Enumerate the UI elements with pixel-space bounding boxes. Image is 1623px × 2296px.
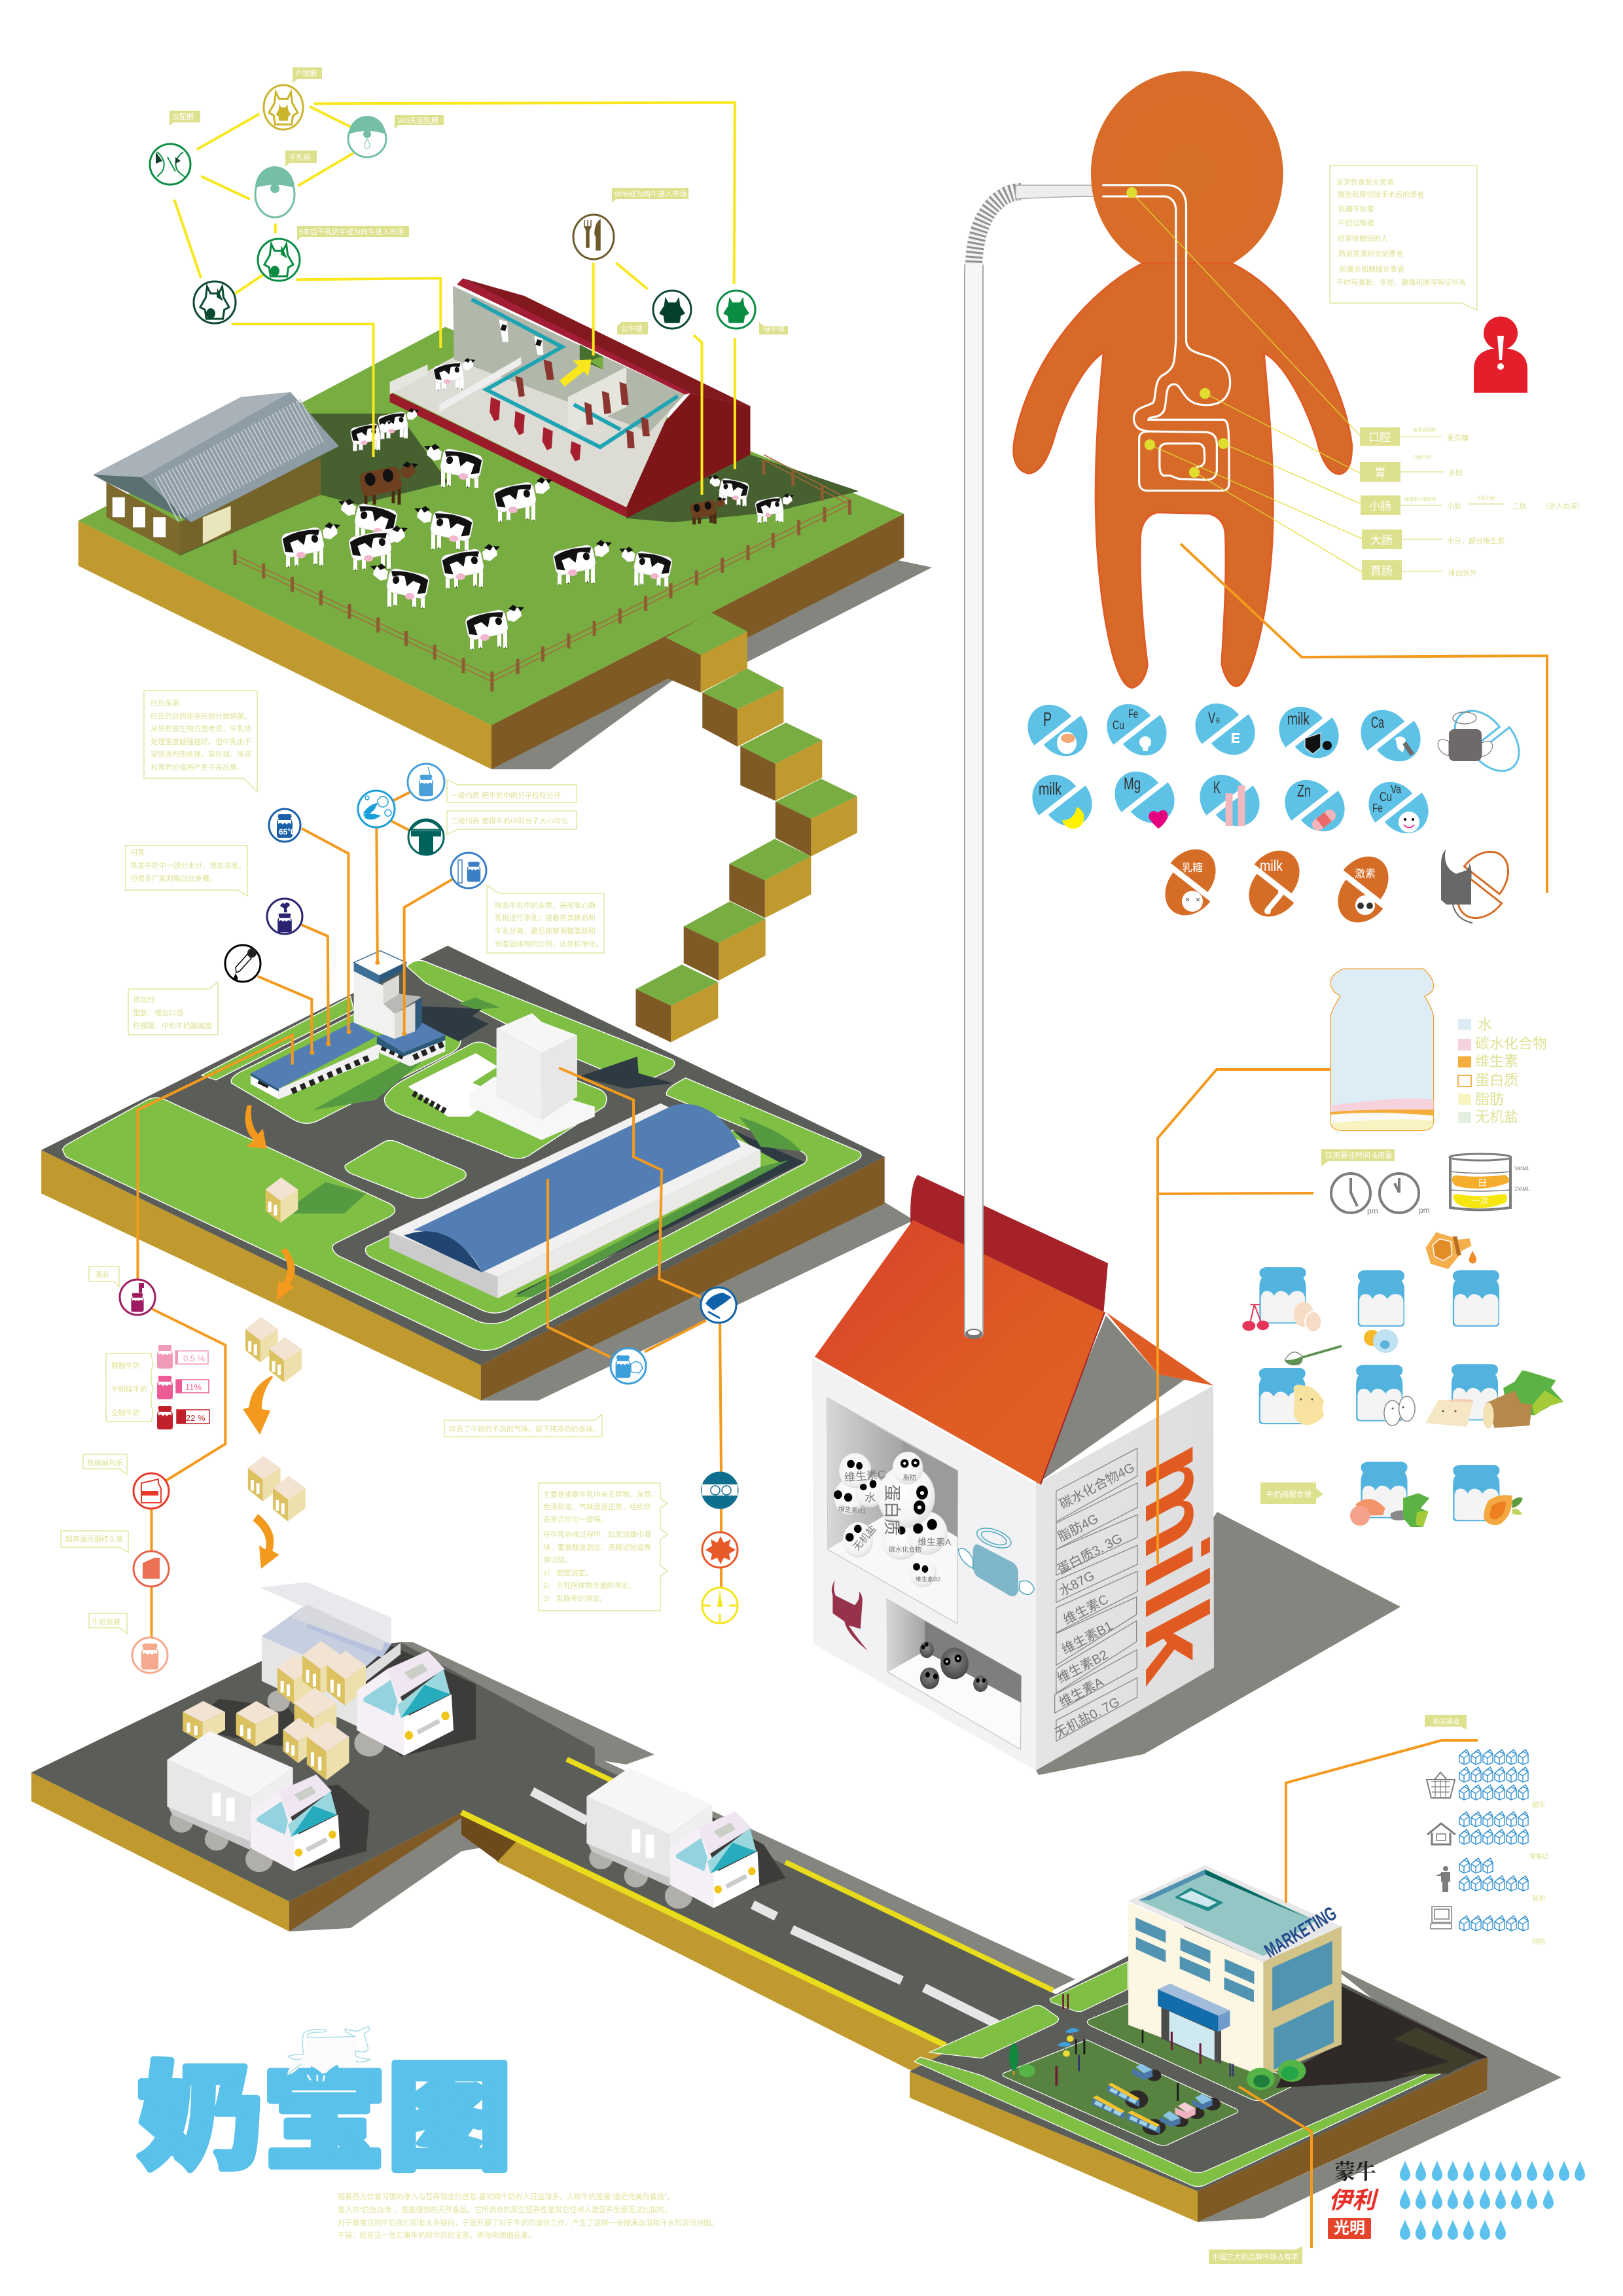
nutrient ball names: 脂肪 xyxy=(903,1473,916,1482)
pasteurization text box: 受到强烈热处理，其外观、味道 xyxy=(151,749,251,759)
milk bottle composition xyxy=(1330,969,1434,1131)
market share label: 中国三大奶品牌市场占有率 xyxy=(1212,2252,1298,2261)
packaging labels: 超高温灭菌砖头装 xyxy=(65,1534,123,1543)
purification text box: 非脂固体物的比例，达到标准化。 xyxy=(495,939,603,948)
flash evaporation text box: 闪蒸 xyxy=(130,848,145,857)
digestive stage boxes: 小肽 xyxy=(1447,501,1461,511)
digestive stage boxes: 口腔 xyxy=(1368,431,1391,444)
dairy barn: grey farmhouse xyxy=(93,392,339,555)
filling and quality lines xyxy=(137,1035,721,1641)
homogenization text boxes xyxy=(447,780,577,834)
digestive stage boxes: 排出体外 xyxy=(1448,568,1477,577)
warning speech box: 腹腔和胃切除手术后的患者 xyxy=(1338,190,1424,199)
process icons: upper: 65℃ xyxy=(279,827,295,836)
nutrient ball names: 碳水化合物 xyxy=(889,1545,921,1554)
warning speech box xyxy=(1330,166,1477,310)
nutrient table on carton: 维生素A xyxy=(1056,1674,1107,1710)
stage labels: 干乳期 xyxy=(289,153,310,162)
digestive stage boxes: 与肠水解 xyxy=(1476,495,1495,501)
milk carton xyxy=(812,1175,1400,1775)
stage labels: 300天泌乳期 xyxy=(397,117,438,125)
harmful substance pills xyxy=(1148,839,1406,933)
nutrient table on carton: 维生素C xyxy=(1061,1592,1111,1628)
warning speech box: 经常接触铅的人 xyxy=(1338,234,1388,243)
purchase channels chart: 超市 xyxy=(1532,1801,1545,1809)
brand share logos and drops: 伊利 xyxy=(1329,2187,1379,2214)
recipe jars with foods xyxy=(1242,1232,1563,1527)
quality inspection text box: 沸试验。 xyxy=(543,1555,572,1564)
nutrient table on carton: 维生素B1 xyxy=(1060,1618,1115,1657)
digestive stage boxes: 麦芽糖 xyxy=(1447,433,1469,442)
factory platform xyxy=(41,946,914,1401)
intro paragraph xyxy=(338,2192,719,2240)
digestive stage boxes: 直肠 xyxy=(1370,565,1393,577)
quality inspection text box: 色泽和滋、气味是否正常，组织状 xyxy=(543,1502,651,1511)
icon: warning person xyxy=(1474,317,1527,393)
quality inspection text box: 2） 全乳固体物含量的测定。 xyxy=(543,1581,635,1590)
warning speech box: 平时有腹胀、多屁、腹痛和腹泻等症状者 xyxy=(1336,278,1466,287)
stepping stones path xyxy=(635,668,857,1042)
quality inspection text box: 1） 密度测定。 xyxy=(543,1568,592,1577)
composition legend xyxy=(1458,1016,1547,1125)
quality inspection text box: 态是否均匀一致等。 xyxy=(543,1515,608,1524)
icon: devil pill outline xyxy=(1441,842,1525,928)
pasteurization text box: 巴氏的目的是杀死部分致病菌， xyxy=(151,711,251,721)
packaging labels: 灌装 xyxy=(95,1270,109,1279)
milk fat percentage chart: 半脱脂牛奶 xyxy=(111,1384,147,1393)
purchase channels chart: 购买渠道 xyxy=(1433,1717,1459,1726)
purification text box: 除去牛乳中的杂质，采用离心静 xyxy=(495,901,596,910)
processing connector lines xyxy=(258,792,454,1055)
digestive stage boxes: 大肠 xyxy=(1370,534,1393,547)
beneficial nutrient pills: V xyxy=(1208,709,1215,727)
recipe label: 牛奶搭配食谱 xyxy=(1266,1490,1311,1499)
process icons: upper xyxy=(225,764,486,982)
homogenization text boxes: 二级均质 使得牛奶中的分子大小均匀 xyxy=(451,816,568,825)
dosage glass xyxy=(1450,1154,1530,1210)
homogenization text boxes: 一级均质 把牛奶中的分子粒粒分开 xyxy=(451,791,561,800)
additives text box: 脂肪：增加口感 xyxy=(133,1008,183,1017)
marketing building xyxy=(1009,1865,1342,2090)
warning speech box: 返流性食管炎患者 xyxy=(1336,177,1394,187)
digestive stage boxes: 白酶作用 xyxy=(1413,454,1431,460)
clocks: pm xyxy=(1367,1206,1378,1215)
stage labels: 母牛犊 xyxy=(763,324,785,333)
deodorization text box: 除去了牛奶的不良的气味，留下纯净的奶香味。 xyxy=(449,1424,600,1433)
market share line xyxy=(1239,2087,1311,2248)
stage labels: 交配期 xyxy=(172,112,194,121)
clocks xyxy=(1331,1174,1430,1215)
brand share logos and drops xyxy=(1328,2160,1585,2240)
marketing sign: MARKETING xyxy=(1261,1903,1340,1962)
nutrient ball names: 维生素B2 xyxy=(916,1575,940,1583)
milk fat percentage chart: 0.5 % xyxy=(183,1354,205,1363)
milk fat percentage chart: 脱脂牛奶 xyxy=(111,1361,140,1370)
digestive stage boxes: 水分，部分维生素 xyxy=(1447,536,1505,545)
buses, cars and pedestrians on the plaza xyxy=(1055,1994,1234,2135)
digestive stage boxes: 胃 xyxy=(1374,467,1386,479)
pasteurization text box: 和营养价值将产生不良后果。 xyxy=(151,762,244,772)
quality inspection text box: 主要是观察牛乳中有无异物、杂质， xyxy=(543,1490,658,1499)
intro paragraph: 不错，就是这一张汇集牛奶精华的奶宝图，等你来细细品鉴。 xyxy=(338,2231,535,2240)
breeding cycle icons xyxy=(150,85,755,329)
intro paragraph: 是人的“白色血液”，是最理想的天然食品。它所具有的原生营养性是其它任何人造营养品都无法比拟的。 xyxy=(338,2205,672,2214)
quality inspection text box xyxy=(539,1483,668,1611)
best time label xyxy=(1321,1149,1395,1166)
packaging labels: 牛奶瓶装 xyxy=(92,1617,120,1626)
food faces xyxy=(1300,1398,1457,1412)
composition legend: 碳水化合物 xyxy=(1475,1035,1547,1052)
quality inspection text box: 在牛乳验收过程中，如发现细小凝 xyxy=(543,1530,651,1539)
beneficial nutrient pills: Ca xyxy=(1371,714,1384,732)
nutrient table on carton: 水87G xyxy=(1056,1568,1097,1599)
farm platform xyxy=(79,327,932,769)
additives text box: 柠檬酸：中和牛奶酸碱度 xyxy=(133,1021,212,1030)
composition legend: 维生素 xyxy=(1475,1053,1518,1069)
digestive stage boxes: （进入血液） xyxy=(1541,501,1584,511)
boxes and flow arrows along production line xyxy=(243,1105,306,1569)
nutrient ball names: 维生素B1 xyxy=(838,1504,866,1516)
orange line from figure to pills xyxy=(1181,544,1547,893)
purification text box: 牛乳分离；最后能够调整脂肪和 xyxy=(495,926,596,935)
nutrient table on carton: 碳水化合物4G xyxy=(1057,1460,1137,1512)
drinking straw xyxy=(965,185,1102,1339)
beneficial nutrient pills: Cu xyxy=(1380,790,1392,804)
milk fat percentage chart: 22 % xyxy=(186,1413,205,1423)
intro paragraph: 对于最常见的牛奶我们却有太多疑问，于是开展了对于牛奶的潜伏工作，产生了这样一张侵满血泪和汗水的资讯地图。 xyxy=(338,2218,719,2227)
stage labels: 90%成为肉牛进入市场 xyxy=(615,189,687,198)
composition legend: 无机盐 xyxy=(1475,1109,1518,1125)
dosage glass: 一次 xyxy=(1472,1196,1489,1206)
pasteurization text box: 从杀死微生物方面考虑，牛乳热 xyxy=(151,724,251,733)
processing plant main building xyxy=(251,951,501,1099)
milk logotype on carton: milk xyxy=(1127,1422,1225,1698)
harmful substance pills: 激素 xyxy=(1355,868,1376,880)
additives text box xyxy=(128,982,218,1035)
milk fat percentage chart: 全脂牛奶 xyxy=(111,1408,140,1417)
beneficial nutrient pills: B xyxy=(1216,716,1220,725)
beneficial nutrient pills: Zn xyxy=(1297,781,1311,800)
purchase channels chart: 其他 xyxy=(1532,1894,1545,1903)
deodorization text box xyxy=(444,1414,602,1437)
harmful substance pills: milk xyxy=(1260,857,1283,875)
brand share logos and drops: 蒙牛 xyxy=(1334,2160,1376,2183)
beneficial nutrient pills: milk xyxy=(1039,779,1062,798)
beneficial nutrient pills: Va xyxy=(1391,783,1402,796)
beneficial nutrient pills: K xyxy=(1213,778,1221,797)
quality inspection text box: 3） 乳脂率的测定。 xyxy=(543,1594,607,1603)
additives text box: 添加剂 xyxy=(133,995,154,1004)
stage labels: 5年后干乳奶牛成为肉牛进入市场 xyxy=(299,227,404,236)
stage labels: 产犊期 xyxy=(295,69,317,78)
breeding cycle connector lines xyxy=(174,103,735,495)
nutrient table on carton: 脂肪4G xyxy=(1055,1511,1101,1545)
dosage glass: 500ML xyxy=(1514,1166,1530,1172)
packaging labels: 新鲜屋利乐 xyxy=(87,1458,123,1467)
digestive stage boxes: 二肽 xyxy=(1512,501,1527,511)
icon: angel pill outline xyxy=(1438,696,1530,786)
pasteurization text box: 巴氏杀菌 xyxy=(151,698,179,708)
pasteurization text box xyxy=(144,691,257,792)
nutrient ball names xyxy=(838,1468,952,1583)
milking parlour building xyxy=(390,278,750,518)
market plaza platform xyxy=(910,1914,1561,2222)
flash evaporation text box: 蒸发牛奶中一部分水分，增加浓度。 xyxy=(130,861,245,870)
warning speech box: 肠道易激综合症患者 xyxy=(1338,249,1403,258)
nutrient table on carton: 蛋白质3. 3G xyxy=(1055,1531,1125,1577)
beneficial nutrient pills: Fe xyxy=(1128,708,1138,721)
digestive stage boxes: 胰蛋酶与胸促使 xyxy=(1404,496,1436,502)
nutrient table on carton: 无机盐0. 7G xyxy=(1052,1695,1122,1741)
flash evaporation text box xyxy=(126,846,247,896)
harmful substance pills: 乳糖 xyxy=(1182,862,1203,874)
purchase channels chart xyxy=(1425,1715,1549,1946)
purification text box xyxy=(487,885,604,953)
digestive stage boxes xyxy=(1360,427,1584,580)
warning speech box: 乳糖不耐者 xyxy=(1338,204,1374,213)
nutrient ball names: 水 xyxy=(865,1492,876,1504)
title: 奶宝图 xyxy=(137,2024,512,2193)
beneficial nutrient pills xyxy=(1018,689,1438,848)
milk fat percentage chart: 11% xyxy=(185,1382,202,1392)
recipe label xyxy=(1260,1482,1323,1504)
stage labels xyxy=(169,67,788,334)
warning speech box: 胆囊炎和胰腺炎患者 xyxy=(1340,264,1404,274)
digestive stage boxes: 多肽 xyxy=(1448,468,1463,477)
cows herd xyxy=(280,358,794,649)
composition legend: 脂肪 xyxy=(1475,1091,1504,1107)
delivery trucks xyxy=(167,1582,759,1909)
beneficial nutrient pills: Cu xyxy=(1113,719,1124,732)
beneficial nutrient pills: Mg xyxy=(1124,774,1141,793)
beneficial nutrient pills: P xyxy=(1043,709,1052,730)
nutrient balls with eyes xyxy=(834,1452,988,1692)
process icons: filling and packaging xyxy=(120,1280,738,1673)
purchase channels chart: 网购 xyxy=(1532,1937,1545,1946)
nutrient table on carton: 维生素B2 xyxy=(1055,1647,1111,1686)
dosage glass: 日 xyxy=(1478,1177,1487,1188)
nutrient ball names: 维生素A xyxy=(918,1537,952,1547)
pasteurization text box: 处理强度越强越好。但牛乳由于 xyxy=(151,737,251,746)
purification text box: 乳机进行净乳；接着将其稀奶和 xyxy=(495,913,596,922)
beneficial nutrient pills: Fe xyxy=(1372,802,1383,815)
purchase channels chart: 零售店 xyxy=(1529,1852,1549,1861)
quality inspection text box: 块，要做酸度测定、酒精试验或煮 xyxy=(543,1543,651,1552)
pill icons xyxy=(1057,732,1419,833)
nutrient ball names: 维生素C xyxy=(844,1468,886,1484)
brand share logos and drops: 光明 xyxy=(1334,2219,1365,2237)
angel and devil icons on carton xyxy=(832,1524,1034,1651)
nutrient table on carton xyxy=(1052,1448,1137,1741)
intro paragraph: 随着西方饮食习惯的渗入与营养观念的普及,喜欢喝牛奶的人日益增多。人称牛奶是最“接近完美的食品”， xyxy=(338,2192,674,2201)
human digestive figure xyxy=(1014,71,1362,688)
flash evaporation text box: 但很多厂家则略过此步骤。 xyxy=(130,874,217,883)
milk fat percentage chart xyxy=(106,1345,209,1429)
fence xyxy=(235,455,849,692)
stage labels: 公牛犊 xyxy=(621,324,643,333)
clocks: pm xyxy=(1419,1206,1430,1215)
nutrient ball names: 蛋白质 xyxy=(882,1484,902,1535)
digestive stage boxes: 小肠 xyxy=(1369,500,1391,512)
orange line bottle to carton xyxy=(1158,1069,1330,1564)
composition legend: 蛋白质 xyxy=(1475,1072,1518,1088)
beneficial nutrient pills: milk xyxy=(1287,709,1310,728)
nutrient ball names: 无机盐 xyxy=(851,1524,879,1553)
market share label xyxy=(1209,2246,1302,2264)
digestive stage boxes: 唾液淀粉酶 xyxy=(1413,427,1436,433)
market purchase channel line xyxy=(1286,1740,1478,1903)
truck yard and road xyxy=(31,1642,1075,2088)
packaging labels xyxy=(61,1266,128,1634)
composition legend: 水 xyxy=(1478,1016,1492,1033)
best time label: 饮用最佳时间 &用量 xyxy=(1325,1151,1393,1160)
warning speech box: 牛奶过敏者 xyxy=(1338,218,1374,227)
dosage glass: 250ML xyxy=(1514,1186,1530,1192)
